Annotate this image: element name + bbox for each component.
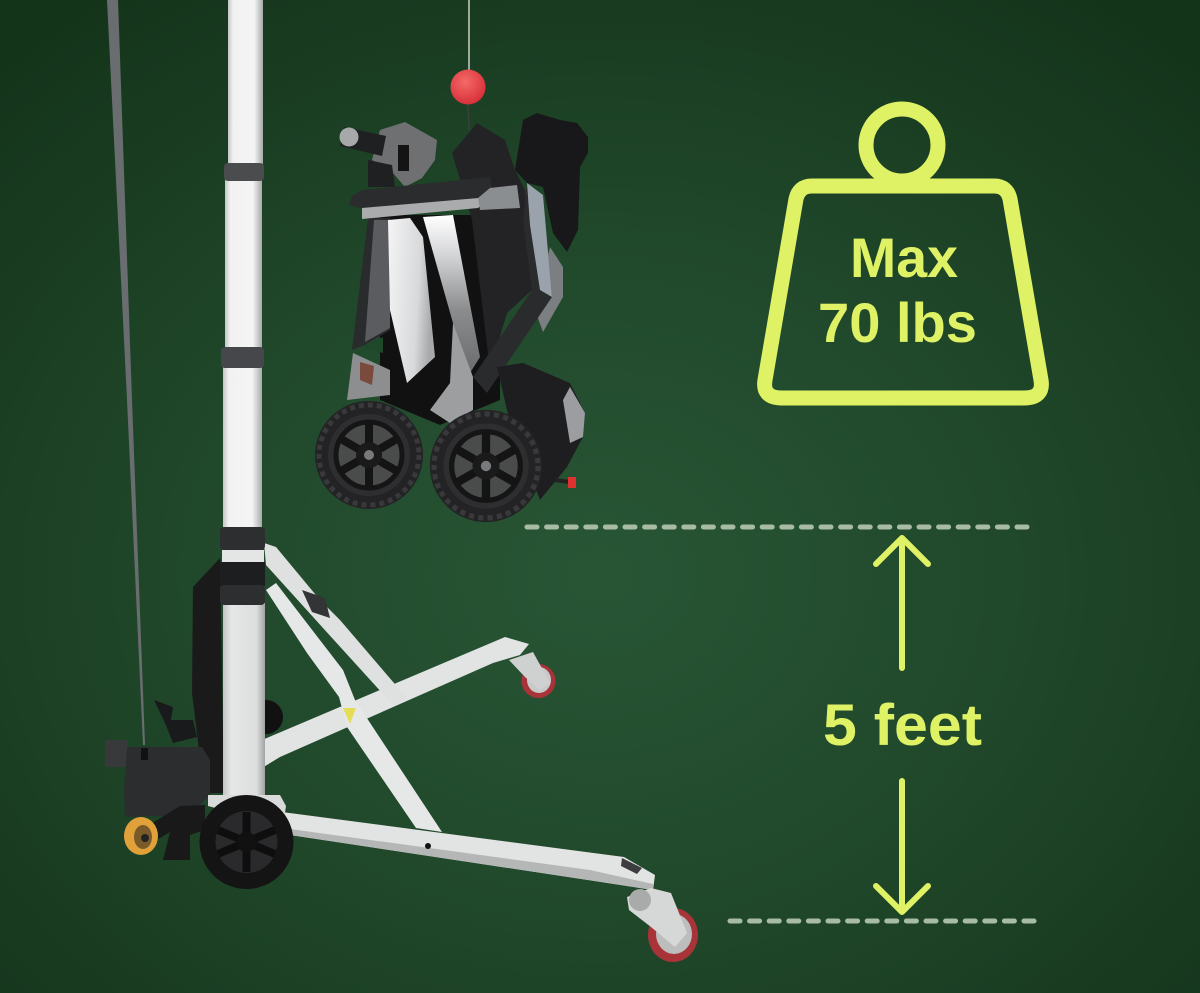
white panel bbox=[388, 218, 435, 383]
rear wheel behind pole bbox=[249, 700, 283, 734]
rear leg bbox=[262, 637, 529, 768]
weight text bbox=[818, 226, 977, 354]
main leg bbox=[282, 812, 655, 890]
strap on the left bbox=[107, 0, 145, 745]
central black area bbox=[380, 215, 500, 425]
chrome panel behind arm bbox=[535, 247, 563, 332]
weight text: 70 lbs bbox=[818, 291, 977, 354]
lift cable and red ball bbox=[450, 0, 486, 130]
weight text: Max bbox=[850, 226, 958, 289]
chrome arm bbox=[473, 183, 552, 393]
main diagonal bbox=[266, 583, 442, 832]
tiller head bbox=[372, 122, 437, 187]
height arrow down bbox=[876, 781, 928, 912]
hinge plates on struts bbox=[302, 590, 330, 618]
folded scooter bbox=[315, 113, 588, 522]
upper strut bbox=[264, 543, 406, 706]
base frame of the lift bbox=[249, 543, 698, 962]
warning label bbox=[343, 708, 356, 724]
lower bracket bbox=[430, 323, 473, 423]
left mechanism bbox=[347, 353, 390, 400]
height arrow up bbox=[876, 538, 928, 668]
seat cushion bbox=[452, 123, 532, 370]
handlebar grip bbox=[340, 127, 386, 156]
wheels bbox=[315, 401, 423, 509]
weight icon bbox=[765, 109, 1041, 398]
dark left panel bbox=[352, 218, 390, 350]
small caster bbox=[522, 664, 556, 698]
telescopic pole bbox=[208, 0, 286, 826]
height label: 5 feet bbox=[823, 693, 982, 758]
chrome column bbox=[423, 215, 480, 373]
back cushion with bag bbox=[515, 113, 588, 252]
rear main wheel bbox=[200, 795, 294, 889]
battery and belt bbox=[105, 558, 224, 860]
height dashed lines bbox=[527, 527, 1036, 921]
armrest bbox=[349, 177, 492, 208]
battery box bbox=[497, 363, 585, 500]
big caster bbox=[648, 908, 698, 962]
arm bar bbox=[362, 197, 490, 219]
